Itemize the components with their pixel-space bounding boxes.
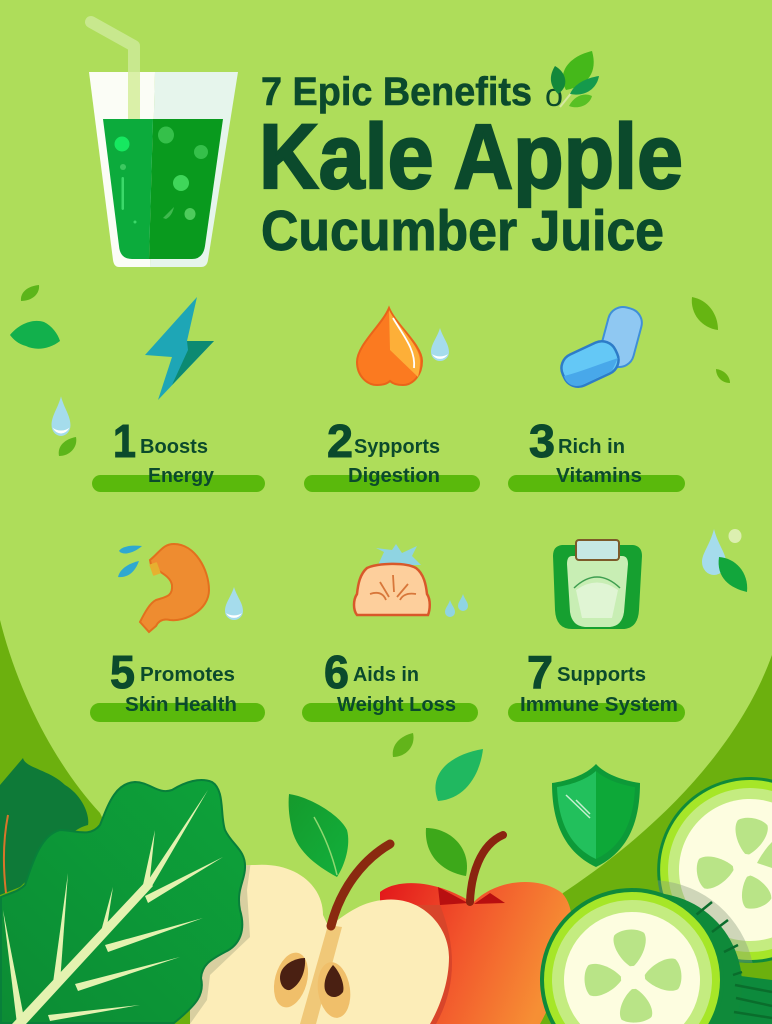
kale shadow on apple — [190, 865, 250, 1024]
number 5: 5 — [110, 646, 135, 698]
kale midrib and veins — [3, 790, 223, 1024]
leaf — [435, 749, 483, 801]
label: Rich in — [558, 435, 625, 458]
number 7: 7 — [527, 646, 553, 698]
benefit 5 — [90, 544, 265, 722]
title line 2: Kale Apple — [259, 106, 683, 208]
seed pattern — [584, 928, 683, 1024]
title line 3: Cucumber Juice — [261, 199, 664, 263]
water drop — [702, 529, 726, 575]
decorative floating leaves — [393, 733, 483, 876]
label pill — [302, 703, 478, 722]
number 6: 6 — [324, 646, 349, 698]
leaf — [426, 828, 467, 876]
icon: stomach — [140, 544, 209, 632]
icon: small blue drops — [118, 546, 142, 577]
water drop — [52, 396, 70, 436]
title line 1: 7 Epic Benefits — [261, 70, 532, 114]
label pill — [92, 475, 265, 492]
number 2: 2 — [327, 415, 353, 467]
benefit 1 — [92, 297, 265, 492]
leaf — [692, 297, 718, 330]
icon: skin cushion — [354, 564, 430, 615]
apple stem — [470, 835, 503, 902]
label: Digestion — [348, 464, 440, 487]
label: Promotes — [140, 663, 235, 686]
shadow from front slice — [658, 880, 753, 963]
seed pattern — [694, 815, 772, 912]
icon: splash — [376, 544, 421, 565]
number 1: 1 — [113, 415, 136, 467]
right half — [310, 899, 449, 1024]
benefit 2 — [304, 308, 480, 492]
label: Skin Health — [125, 693, 237, 716]
right seed cut by page edge — [757, 842, 772, 868]
leaf — [10, 321, 60, 349]
label: Energy — [148, 464, 215, 487]
seeds — [280, 958, 305, 990]
decorative drop and leaf right — [702, 529, 747, 592]
left half — [190, 865, 330, 1024]
leaf — [393, 733, 414, 757]
illustration: cut apple — [190, 840, 449, 1024]
label: Boosts — [140, 435, 208, 458]
illustration: kale back leaf — [0, 758, 88, 895]
illustration: front cucumber slice — [540, 888, 724, 1024]
icon: shield — [552, 764, 640, 867]
benefit 6 — [302, 544, 478, 722]
illustration: whole apple — [380, 835, 572, 1024]
leaf — [719, 557, 747, 592]
decorative leaves left — [10, 285, 76, 456]
title letter o: o — [545, 77, 563, 113]
label pill — [304, 475, 480, 492]
icon: water drop — [431, 328, 449, 361]
illustration: kale main leaf — [1, 780, 245, 1024]
dot — [728, 529, 742, 543]
label: Sypports — [354, 435, 440, 458]
leaf — [59, 437, 76, 456]
label: Aids in — [353, 663, 419, 686]
decorative leaves right — [692, 297, 730, 383]
title — [259, 70, 683, 263]
icon: orange drop — [357, 308, 422, 385]
label pill — [508, 703, 685, 722]
icon: juice glass — [89, 22, 238, 267]
icon: title leaf sprig — [551, 51, 599, 107]
illustration: leaf above apple — [289, 794, 348, 877]
icon: lightning bolt — [145, 297, 214, 400]
benefit 7 — [508, 540, 685, 722]
apple stem — [331, 844, 390, 926]
label pill — [508, 475, 685, 492]
icon: green scale — [553, 540, 642, 629]
benefit 3 — [508, 304, 685, 492]
icon: capsule — [557, 304, 645, 392]
illustration: back cucumber slice — [657, 777, 772, 963]
core — [300, 925, 342, 1024]
icon: water drop — [225, 587, 243, 620]
leaf — [21, 285, 39, 301]
label: Weight Loss — [337, 693, 456, 716]
label: Immune System — [520, 693, 678, 716]
icon: small drops — [445, 594, 468, 617]
label: Vitamins — [556, 464, 642, 487]
number 3: 3 — [529, 415, 555, 467]
label: Supports — [557, 663, 646, 686]
label pill — [90, 703, 265, 722]
leaf — [716, 369, 730, 383]
illustration: cucumber skin side — [558, 893, 772, 1024]
